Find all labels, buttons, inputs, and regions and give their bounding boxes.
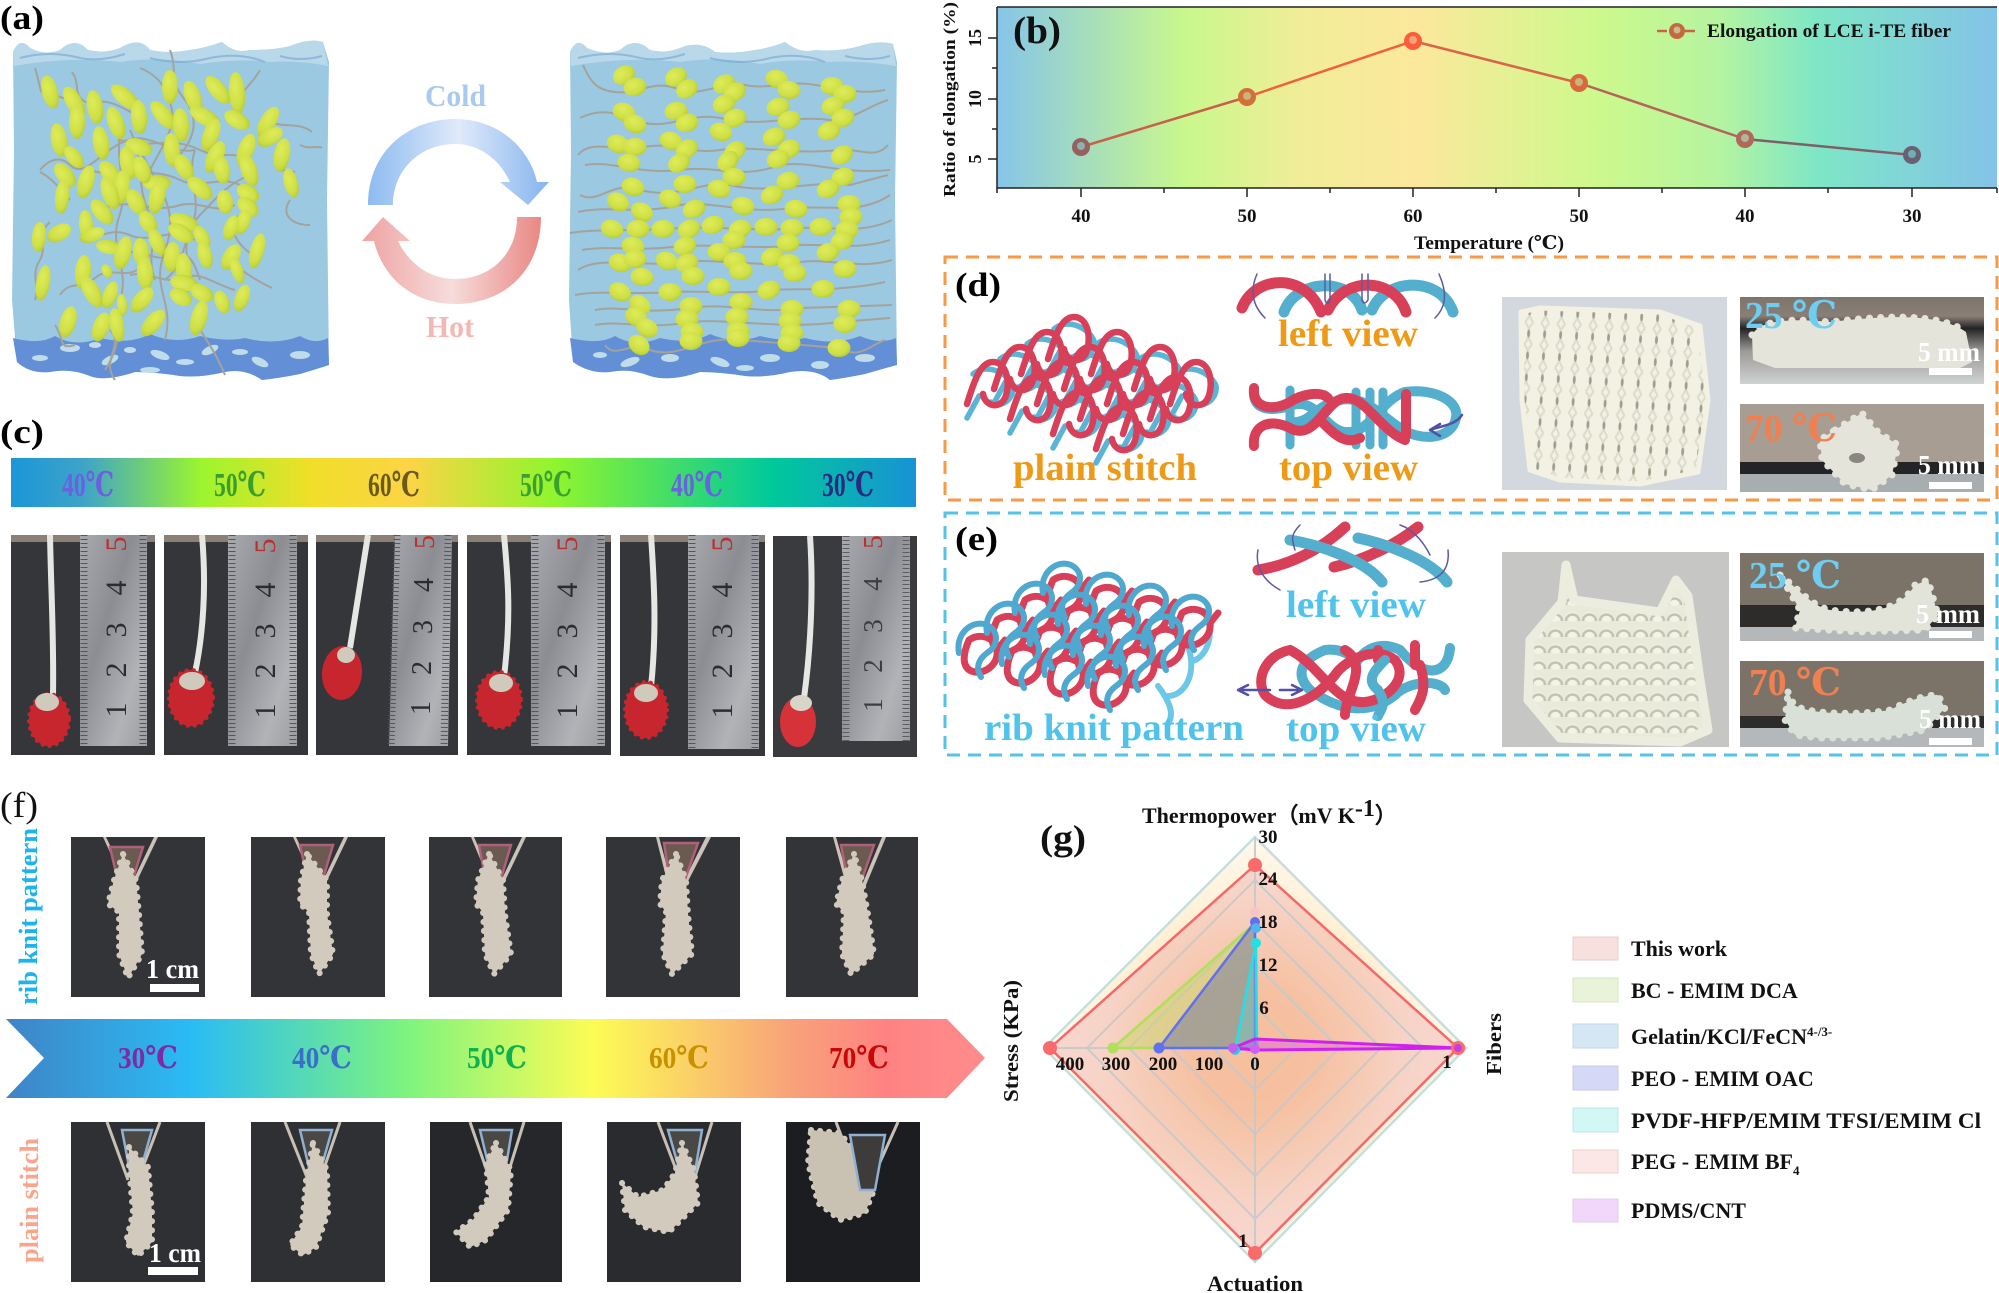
polymer chains — [35, 50, 322, 380]
axes and ticks — [988, 7, 1997, 197]
arrow: hot (red) — [362, 217, 541, 304]
y-axis tick labels: 15 — [965, 29, 985, 47]
photo: plain stitch at 70 ℃ — [1740, 404, 1984, 492]
y-axis tick labels — [965, 29, 985, 164]
x-axis tick labels: 40 — [1072, 206, 1090, 227]
label (a): (a) — [0, 0, 44, 37]
legend item: PDMS/CNT — [1573, 1198, 1746, 1223]
label (e): (e) — [955, 521, 998, 558]
plot background — [997, 7, 1997, 188]
text: rib knit pattern: rib knit pattern — [984, 707, 1244, 749]
knit lattice — [967, 317, 1216, 463]
temperature labels: 40℃ — [292, 1040, 352, 1075]
photo: 50℃: 5 — [249, 538, 282, 554]
temperature labels: 60℃ — [649, 1040, 709, 1075]
x-axis tick labels: 40 — [1736, 206, 1754, 227]
bottom water highlights — [593, 349, 875, 371]
radial tick labels: 200 — [1149, 1054, 1177, 1075]
photo: rib knit 30℃ — [71, 837, 205, 997]
x-axis title: Temperature (℃) — [1414, 233, 1564, 254]
photo: plain stitch 30℃: 1 cm — [149, 1238, 201, 1268]
left view drawing — [1257, 525, 1448, 590]
bottom water highlights — [32, 342, 310, 373]
PDMS/CNT series — [1233, 1039, 1458, 1050]
photo: 50℃: 2 — [249, 664, 282, 678]
photo strip (c): fiber with weight beside ruler at six temperatures — [11, 535, 917, 757]
photo: 40℃: 1 — [100, 702, 133, 718]
label (g): (g) — [1040, 818, 1086, 858]
radial tick labels: 6 — [1259, 998, 1269, 1019]
radial tick labels: 12 — [1258, 955, 1278, 976]
temperature labels: 50℃ — [467, 1040, 527, 1075]
photo row: rib knit pattern at five temperatures — [71, 837, 918, 997]
photo: rib knit at 70 ℃: 70 ℃ — [1749, 662, 1841, 704]
radial tick labels: 100 — [1195, 1054, 1223, 1075]
polymer chains — [570, 65, 892, 353]
temperature labels: 30℃ — [822, 467, 874, 504]
photo: 50℃ — [164, 535, 308, 755]
photo: 60℃: 4 — [409, 578, 440, 592]
panel (e): rib knit pattern — [945, 513, 1997, 755]
photo: 60℃: 5 — [410, 535, 441, 549]
dashed frame — [945, 513, 1997, 755]
photo: 30℃: 2 — [858, 659, 888, 673]
data line — [1081, 41, 1912, 155]
arrow shape — [6, 1019, 985, 1098]
temperature labels: 50℃ — [520, 467, 572, 504]
photo: 40℃ (cooling) — [620, 535, 765, 756]
data markers — [1072, 32, 1921, 164]
x-axis tick labels: 50 — [1238, 206, 1256, 227]
rib knit lattice — [958, 564, 1218, 724]
radial tick labels: 18 — [1258, 912, 1278, 933]
photo: rib knit at 70 ℃ — [1740, 661, 1984, 747]
side label: rib knit pattern: rib knit pattern — [14, 827, 43, 1005]
temperature labels: 30℃ — [118, 1040, 178, 1075]
text: left view: left view — [1286, 584, 1427, 626]
y-axis tick labels: 10 — [965, 90, 985, 108]
photo: rib knit 70℃ — [786, 837, 918, 997]
temperature labels: 40℃ — [62, 467, 114, 504]
photo: plain stitch fabric — [1502, 297, 1727, 490]
text: plain stitch: plain stitch — [1013, 447, 1197, 489]
x-axis tick labels: 60 — [1404, 206, 1422, 227]
panel (b): elongation line chart — [940, 2, 1997, 254]
label: Hot: Hot — [426, 309, 475, 344]
photo: 50℃ (cooling) — [467, 535, 611, 755]
photo: 40℃ (cooling): 5 — [706, 536, 739, 552]
label (d): (d) — [955, 267, 1001, 304]
photo: 40℃ (cooling): 4 — [706, 582, 739, 598]
legend item: PEO - EMIM OAC: PEO - EMIM OAC — [1631, 1066, 1814, 1091]
legend item: Gelatin/KCl/FeCN: 4-/3- — [1807, 1024, 1832, 1039]
x-axis tick labels: 50 — [1570, 206, 1588, 227]
photo: 40℃: 3 — [100, 622, 133, 638]
radar grid — [1044, 837, 1466, 1262]
temperature labels: 40℃ — [671, 467, 723, 504]
series markers — [1043, 858, 1465, 1260]
photo: 50℃: 4 — [249, 582, 282, 598]
left view drawing — [1242, 274, 1453, 318]
axis title: Fibers: Fibers — [1482, 1013, 1506, 1075]
dashed frame — [945, 257, 1997, 500]
photo: plain stitch at 25 ℃ — [1740, 295, 1984, 384]
photo: rib knit at 25 ℃: 25 ℃ — [1749, 555, 1841, 597]
water bottom band — [13, 334, 329, 380]
photo: 40℃ — [11, 535, 155, 755]
x-axis tick labels — [1072, 206, 1922, 227]
gradient bar — [11, 458, 916, 507]
water surface band — [13, 41, 328, 66]
axis title: Stress: Stress (KPa) — [999, 980, 1023, 1102]
panel (g): radar chart — [999, 796, 1506, 1293]
photo: rib knit at 70 ℃: 5 mm — [1919, 704, 1981, 734]
radial tick labels: 300 — [1102, 1054, 1130, 1075]
legend item: PEG - EMIM BF4 — [1573, 1149, 1800, 1178]
photo: 40℃ (cooling): 3 — [706, 624, 739, 638]
photo: rib knit at 25 ℃ — [1740, 553, 1984, 641]
photo: 40℃ (cooling): 2 — [706, 664, 739, 678]
photo: plain stitch at 70 ℃: 5 mm — [1918, 450, 1980, 480]
photo: rib knit 60℃ — [606, 837, 740, 997]
temperature labels: 50℃ — [214, 467, 266, 504]
x-axis tick labels: 30 — [1902, 206, 1922, 227]
water bottom band — [570, 334, 897, 380]
legend item: PEG - EMIM BF4: PEG - EMIM BF — [1631, 1149, 1793, 1174]
water surface band — [570, 42, 896, 66]
photo: 40℃: 2 — [100, 662, 133, 678]
radial tick labels: 1 — [1238, 1231, 1248, 1252]
legend item: BC - EMIM DCA: BC - EMIM DCA — [1631, 978, 1798, 1003]
legend item: PDMS/CNT: PDMS/CNT — [1631, 1198, 1746, 1223]
photo: 50℃: 3 — [249, 624, 282, 638]
photo: rib knit 30℃: 1 cm — [146, 954, 199, 984]
photo: plain stitch 60℃ — [607, 1122, 741, 1282]
photo: plain stitch 40℃ — [251, 1122, 385, 1282]
radial tick labels: 0 — [1250, 1054, 1260, 1075]
axis title: Thermopower: -1 — [1355, 796, 1375, 822]
cycle arrows between states — [362, 78, 549, 344]
photo: 30℃: 5 — [858, 535, 888, 549]
photo: 60℃: 3 — [408, 620, 439, 634]
top view drawing — [1238, 645, 1450, 716]
photo: 40℃ (cooling): 1 — [706, 704, 739, 718]
photo: plain stitch at 25 ℃: 5 mm — [1918, 337, 1980, 367]
photo: rib knit fabric — [1502, 552, 1729, 747]
arrow: cold (blue) — [368, 119, 549, 205]
photo: 60℃ — [316, 535, 458, 755]
photo: 50℃ (cooling): 3 — [551, 624, 584, 638]
radial tick labels: 400 — [1056, 1054, 1084, 1075]
water surface ripples — [578, 54, 890, 62]
photo: 50℃ (cooling): 5 — [551, 536, 584, 552]
label (c): (c) — [0, 414, 44, 451]
PVDF-HFP series — [1235, 943, 1257, 1050]
disordered mesogens — [31, 70, 302, 344]
photo: 40℃: 5 — [100, 536, 133, 552]
water block — [569, 42, 897, 380]
temperature arrow band — [6, 1019, 985, 1098]
label (b): (b) — [1013, 10, 1061, 52]
radial tick labels: 1 — [1442, 1052, 1452, 1073]
ordered mesogens — [598, 61, 862, 359]
photo: 50℃ (cooling): 4 — [551, 582, 584, 598]
photo: 30℃ — [773, 535, 917, 757]
top view drawing — [1254, 388, 1462, 446]
label (f): (f) — [0, 785, 38, 825]
photo: 60℃: 1 — [406, 701, 437, 715]
photo: 30℃: 4 — [858, 577, 888, 591]
legend item: PEG - EMIM BF4: 4 — [1793, 1163, 1800, 1178]
water surface ripples — [20, 54, 322, 62]
temperature labels: 60℃ — [368, 467, 420, 504]
photo: plain stitch at 25 ℃: 25 ℃ — [1745, 295, 1837, 337]
radar background — [1044, 837, 1466, 1262]
text: left view: left view — [1278, 313, 1419, 355]
photo: rib knit 40℃ — [251, 837, 385, 997]
legend item: This work: This work — [1631, 936, 1728, 961]
photo: 30℃: 1 — [858, 698, 888, 712]
legend item: PVDF-HFP/EMIM TFSI/EMIM Cl: PVDF-HFP/EMIM TFSI/EMIM Cl — [1631, 1108, 1981, 1133]
photo: 50℃ (cooling): 1 — [551, 704, 584, 718]
radial tick labels: 24 — [1258, 869, 1278, 890]
text: top view: top view — [1286, 708, 1427, 750]
legend item: Gelatin/KCl/FeCN — [1573, 1024, 1832, 1049]
photo: rib knit at 25 ℃: 5 mm — [1916, 599, 1980, 629]
radial tick labels: 30 — [1258, 827, 1278, 848]
radial tick labels — [1056, 827, 1452, 1252]
panel (c): temperature bar — [11, 458, 916, 507]
panel (a) left: disordered LCE in water block — [12, 41, 329, 380]
photo: plain stitch 70℃ — [786, 1122, 920, 1282]
axis title: Thermopower: ） — [1375, 803, 1397, 828]
photo: 30℃: 3 — [858, 619, 888, 633]
label: Cold: Cold — [425, 78, 486, 113]
photo: plain stitch 30℃ — [71, 1122, 205, 1282]
photo: plain stitch at 70 ℃: 70 ℃ — [1745, 408, 1837, 450]
photo row: plain stitch at five temperatures — [71, 1122, 920, 1282]
temperature labels — [118, 1040, 889, 1075]
photo: 50℃ (cooling): 2 — [551, 664, 584, 678]
axis title: Thermopower: Thermopower（mV K — [1142, 803, 1355, 828]
panel (a) right: ordered LCE in water block — [569, 42, 897, 380]
BC - EMIM DCA series — [1113, 923, 1255, 1048]
temperature labels: 70℃ — [829, 1040, 889, 1075]
y-axis tick labels: 5 — [965, 154, 985, 164]
photo: 40℃: 4 — [100, 580, 133, 596]
y-axis title: Ratio of elongation (%) — [940, 2, 959, 197]
This work series — [1050, 865, 1458, 1253]
legend (g) — [1573, 936, 1981, 1223]
text: top view: top view — [1279, 447, 1419, 489]
photo: rib knit 50℃ — [429, 837, 562, 997]
photo: plain stitch 50℃ — [430, 1122, 562, 1282]
water block — [12, 41, 329, 380]
legend item: Gelatin/KCl/FeCN: Gelatin/KCl/FeCN — [1631, 1024, 1807, 1049]
legend item: This work — [1573, 936, 1728, 961]
temperature labels — [62, 467, 874, 504]
legend: Elongation of LCE i-TE fiber — [1707, 21, 1952, 42]
photo: 60℃: 2 — [407, 661, 438, 675]
side label: plain stitch: plain stitch — [15, 1137, 44, 1263]
photo: 50℃: 1 — [249, 704, 282, 718]
panel (d): plain stitch — [945, 257, 1997, 500]
PEO - EMIM OAC series — [1159, 922, 1255, 1048]
